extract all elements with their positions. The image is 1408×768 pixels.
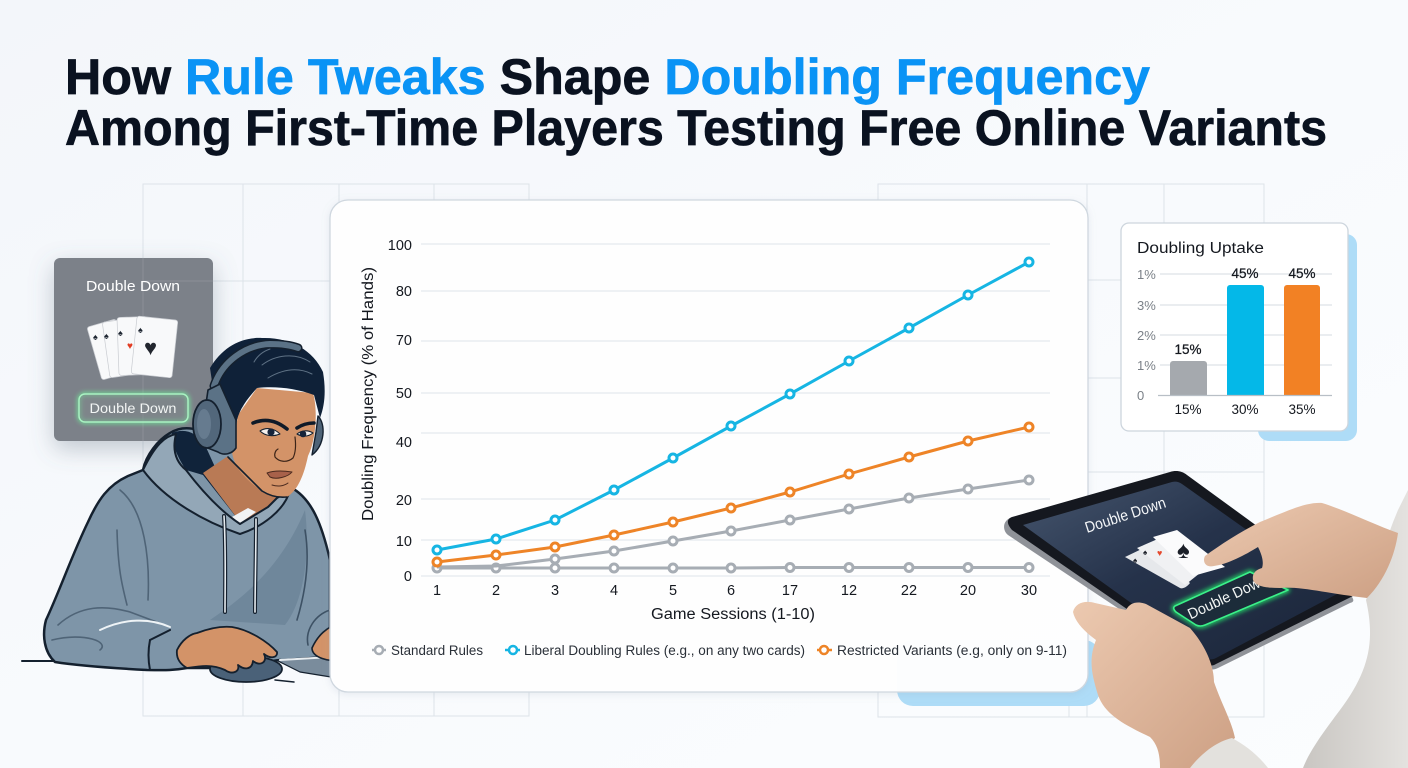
bar value labels: 45%: [1231, 266, 1259, 281]
x axis title: Game Sessions (1-10): [651, 606, 815, 623]
hoodie: [44, 428, 330, 670]
tablet glowing button: Double Dow: [1185, 575, 1263, 623]
bar chart gridlines: [1160, 274, 1332, 365]
panel: double down popup: [54, 258, 213, 441]
hoodie shading: [52, 490, 330, 670]
x axis labels: 2: [492, 583, 500, 599]
y axis labels: 70: [396, 333, 412, 349]
nose and mouth: [275, 437, 296, 461]
illustration: player in hoodie with headphones: [22, 338, 340, 682]
sleeve: right arm: [1303, 490, 1408, 768]
x axis labels: 4: [610, 583, 618, 599]
neck: [203, 456, 276, 520]
x axis labels: 20: [960, 583, 976, 599]
icon: fanned playing cards: ♥: [144, 335, 157, 360]
popup heading: Double Down: [86, 279, 180, 295]
bar: standard: [1170, 361, 1207, 395]
bar chart y labels: 2%: [1137, 328, 1156, 343]
background grid: right: [878, 184, 1264, 717]
tablet body: [1004, 472, 1353, 670]
button: double down: Double Down: [90, 400, 176, 416]
left hand on mouse: [177, 627, 277, 672]
legend: Standard Rules: [391, 643, 483, 658]
x axis labels: 3: [551, 583, 559, 599]
drawstrings: [224, 516, 256, 612]
bar value labels: 15%: [1174, 342, 1202, 357]
keyboard: [276, 656, 331, 677]
gridlines: [421, 244, 1050, 576]
bar chart title: Doubling Uptake: [1137, 240, 1264, 257]
y axis labels: 40: [396, 435, 412, 451]
eyes and brows: [253, 420, 314, 429]
icon: fanned playing cards: [87, 316, 178, 380]
legend: Liberal Doubling Rules (e.g., on any two cards): [524, 643, 805, 658]
left hand: [1073, 602, 1235, 768]
tablet cards: ♠: [1143, 548, 1148, 557]
title: Among First-Time Players Testing Free Online Variants: [65, 100, 1327, 156]
right hand: [1204, 503, 1398, 598]
tablet cards: ♥: [1157, 548, 1162, 558]
bar chart y labels: 3%: [1137, 298, 1156, 313]
y axis labels: 20: [396, 493, 412, 509]
bar chart y labels: [1137, 267, 1156, 403]
cord: [275, 680, 294, 682]
title: [65, 49, 1327, 156]
tablet screen: [1023, 482, 1337, 659]
x axis labels: 1: [433, 583, 441, 599]
right hand at keyboard: [311, 627, 330, 661]
bar chart y labels: 1%: [1137, 267, 1156, 282]
face: [232, 388, 316, 497]
bar category labels: 30%: [1231, 402, 1259, 417]
bar value labels: [1174, 266, 1316, 357]
y axis labels: 80: [396, 284, 412, 300]
tablet cards: [1125, 530, 1225, 588]
panel: doubling uptake bar chart: [1121, 223, 1357, 441]
sleeve: left arm: [1190, 738, 1268, 768]
x axis labels: 30: [1021, 583, 1037, 599]
tablet heading: Double Down: [1083, 495, 1168, 537]
line: standard rules rising: [437, 476, 1033, 567]
x axis labels: 6: [727, 583, 735, 599]
x axis labels: 12: [841, 583, 857, 599]
background grid: left: [143, 184, 529, 716]
tablet glowing button: [1174, 572, 1288, 626]
x axis labels: 22: [901, 583, 917, 599]
inner hood: [172, 430, 235, 516]
y axis title: Doubling Frequency (% of Hands): [360, 267, 377, 521]
icon: fanned playing cards: ♥: [127, 341, 133, 352]
bar chart y labels: 0: [1137, 388, 1144, 403]
legend: Restricted Variants (e.g, only on 9-11): [837, 643, 1067, 658]
icon: fanned playing cards: ♠: [93, 332, 98, 342]
tablet cards: ♠: [1177, 537, 1190, 564]
panel: line chart card: [330, 200, 1088, 692]
line: standard rules flat: [433, 564, 1033, 572]
line: restricted variants: [433, 423, 1033, 566]
icon: fanned playing cards: ♠: [138, 325, 143, 335]
icon: fanned playing cards: ♠: [104, 331, 109, 341]
y axis labels: [388, 238, 412, 585]
desk line: [21, 660, 54, 662]
headphones: [214, 344, 298, 386]
y axis labels: 0: [404, 569, 412, 585]
x axis labels: [433, 583, 1037, 599]
bar category labels: 35%: [1288, 402, 1316, 417]
y axis labels: 50: [396, 386, 412, 402]
x axis labels: 17: [782, 583, 798, 599]
bar chart y labels: 1%: [1137, 358, 1156, 373]
hood collar: [143, 434, 290, 534]
legend: [372, 643, 1067, 658]
accent: blue shadow behind chart: [897, 640, 1100, 706]
line: liberal doubling rules: [433, 258, 1033, 554]
y axis labels: 10: [396, 534, 412, 550]
bar: liberal: [1227, 285, 1264, 395]
hair: [210, 338, 325, 424]
x axis labels: 5: [669, 583, 677, 599]
icon: fanned playing cards: ♠: [118, 328, 123, 338]
bar value labels: 45%: [1288, 266, 1316, 281]
y axis labels: 100: [388, 238, 412, 254]
mouse: [210, 656, 282, 682]
title: How Rule Tweaks Shape Doubling Frequency: [65, 49, 1150, 105]
button: double down: [79, 394, 188, 422]
tablet cards: ♠: [1133, 556, 1138, 565]
bar category labels: 15%: [1174, 402, 1202, 417]
illustration: tablet and hands: [1004, 471, 1408, 768]
bar: restricted: [1284, 285, 1320, 395]
bar category labels: [1174, 402, 1316, 417]
